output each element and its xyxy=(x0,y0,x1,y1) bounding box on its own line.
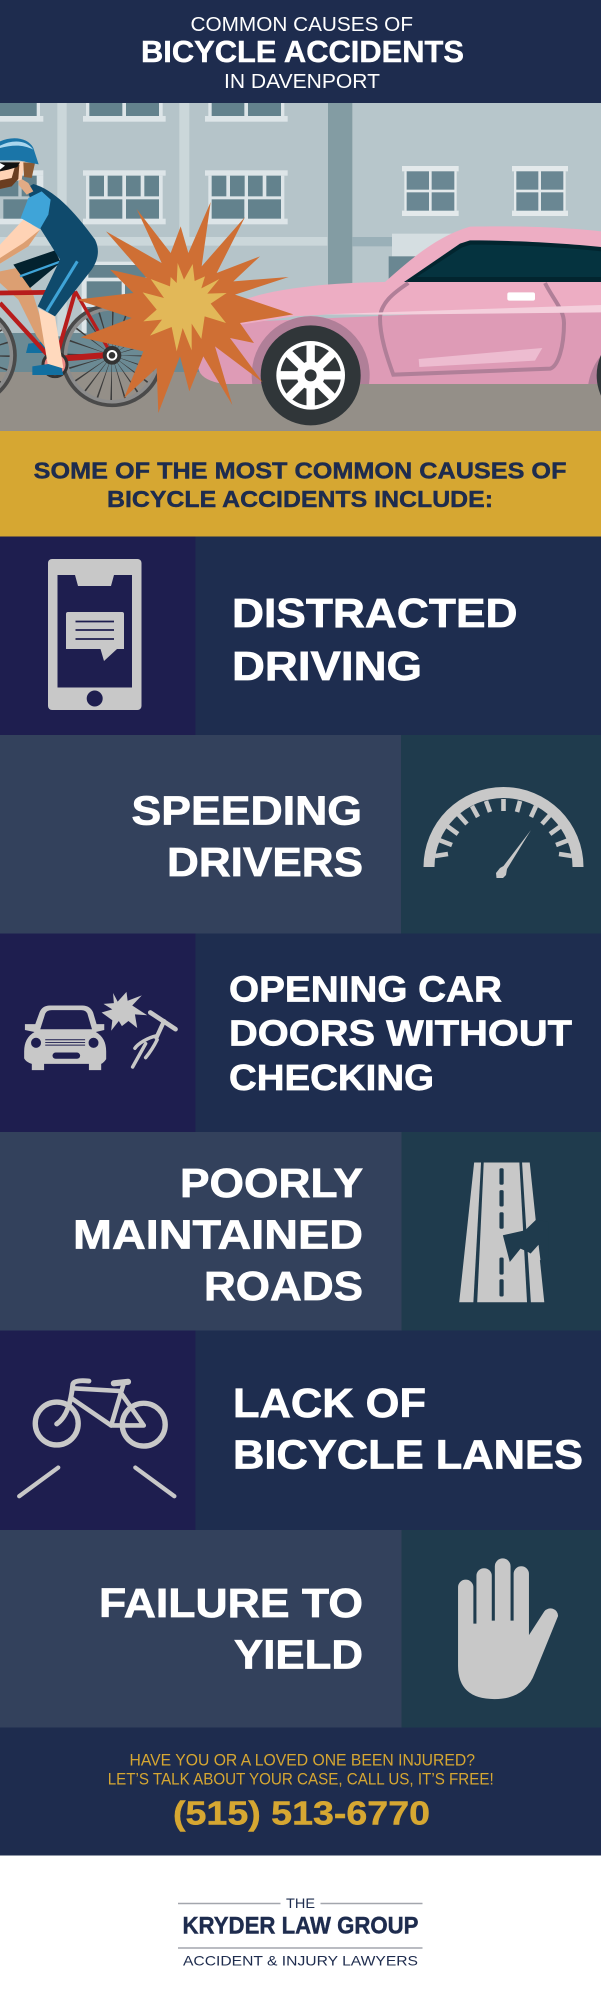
rear bicycle wheel xyxy=(62,305,162,405)
heading line 2: BICYCLE LANES xyxy=(233,1432,583,1478)
panel: failure to yield xyxy=(0,1530,601,1728)
frame xyxy=(0,291,112,361)
illustration: cyclist hit by car xyxy=(0,103,601,431)
icon: car door hitting cyclist xyxy=(24,992,176,1070)
logo: firm name: KRYDER LAW GROUP xyxy=(182,1912,418,1940)
panel: speeding drivers xyxy=(0,735,601,934)
left windows xyxy=(0,103,288,333)
title line 1: COMMON CAUSES OF xyxy=(190,14,413,36)
heading: FAILURE TO xyxy=(99,1580,363,1626)
right building xyxy=(328,103,601,290)
heading: POORLY xyxy=(180,1160,363,1206)
helmet xyxy=(0,138,39,164)
crash burst xyxy=(77,202,293,413)
heading line 2: YIELD xyxy=(234,1632,363,1678)
cta line 2: LET’S TALK ABOUT YOUR CASE, CALL US, IT’S FREE! xyxy=(108,1770,494,1788)
gold intro banner xyxy=(0,431,601,536)
cta line 1: HAVE YOU OR A LOVED ONE BEEN INJURED? xyxy=(130,1752,475,1770)
panel: lack of bicycle lanes xyxy=(0,1330,601,1530)
street xyxy=(0,372,601,431)
icon: smartphone with message xyxy=(48,559,142,710)
heading line 2: DOORS WITHOUT xyxy=(229,1012,572,1054)
heading line 3: ROADS xyxy=(204,1263,363,1309)
title line 2: BICYCLE ACCIDENTS xyxy=(141,34,464,69)
front bicycle wheel xyxy=(0,305,15,405)
intro line 2: BICYCLE ACCIDENTS INCLUDE: xyxy=(107,486,493,512)
building background xyxy=(0,103,327,373)
heading line 2: DRIVING xyxy=(232,643,422,689)
intro line 1: SOME OF THE MOST COMMON CAUSES OF xyxy=(34,458,566,484)
pink car xyxy=(198,226,601,425)
heading line 2: MAINTAINED xyxy=(73,1212,363,1258)
logo: tagline: ACCIDENT & INJURY LAWYERS xyxy=(183,1952,418,1968)
heading: DISTRACTED xyxy=(232,590,518,636)
header panel xyxy=(0,0,601,103)
panel: poorly maintained roads xyxy=(0,1132,601,1330)
heading line 2: DRIVERS xyxy=(167,839,363,885)
heading: LACK OF xyxy=(233,1380,426,1426)
panel: call to action xyxy=(0,1728,601,1856)
logo: The Kryder Law Group xyxy=(178,1895,422,1968)
icon: cracked road xyxy=(459,1163,548,1302)
heading: SPEEDING xyxy=(132,788,362,834)
phone number: (515) 513-6770 xyxy=(173,1794,430,1832)
panel: distracted driving xyxy=(0,536,601,735)
title line 3: IN DAVENPORT xyxy=(224,71,380,93)
icon: stop hand xyxy=(458,1558,558,1699)
heading line 3: CHECKING xyxy=(229,1057,434,1098)
icon: bicycle with lane lines xyxy=(19,1381,174,1496)
logo: the: THE xyxy=(286,1895,315,1911)
panel: opening car doors xyxy=(0,934,601,1132)
icon: speedometer xyxy=(424,787,584,878)
cyclist and bicycle xyxy=(0,138,162,405)
car front wheel xyxy=(261,325,361,425)
heading: OPENING CAR xyxy=(229,968,502,1010)
